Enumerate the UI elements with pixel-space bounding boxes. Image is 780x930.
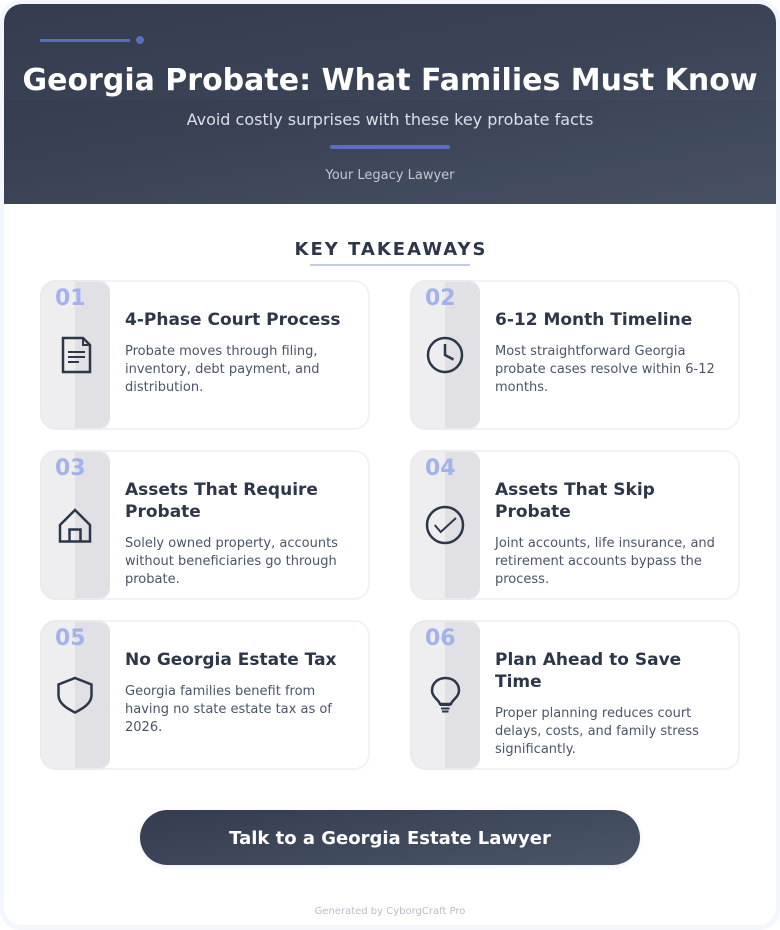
header banner <box>4 4 776 204</box>
icon: document <box>62 336 92 374</box>
section heading: KEY TAKEAWAYS <box>294 239 487 260</box>
card 3: assets requiring probate: 03 <box>55 456 86 481</box>
card 5: no estate tax <box>40 620 370 770</box>
card 2 body: months. <box>495 380 548 395</box>
card 3 body <box>125 536 338 587</box>
call to action button <box>140 810 640 865</box>
card 4 heading <box>495 480 655 522</box>
card 4 body: Joint accounts, life insurance, and <box>495 536 715 551</box>
card 5 body: Georgia families benefit from <box>125 684 315 699</box>
header lower band <box>4 100 776 204</box>
icon: clock <box>426 336 464 374</box>
card 4 body <box>494 536 715 587</box>
card 6 heading: Time <box>495 672 542 692</box>
card 3 heading: Assets That Require <box>125 480 318 500</box>
card 5 heading: No Georgia Estate Tax <box>125 650 337 670</box>
card 3: assets requiring probate <box>40 450 370 600</box>
card 4: assets skipping probate: 04 <box>425 456 456 481</box>
card 2: timeline: 02 <box>425 286 456 311</box>
card 1 body <box>125 344 320 395</box>
card 1 body: inventory, debt payment, and <box>125 362 320 377</box>
card 5 body: having no state estate tax as of <box>125 702 332 717</box>
call to action button: Talk to a Georgia Estate Lawyer <box>229 828 551 849</box>
card 3 body: Solely owned property, accounts <box>125 536 338 551</box>
title: Georgia Probate: What Families Must Know <box>22 63 758 98</box>
card 1: 4-phase court process <box>40 280 370 430</box>
card 6 body: significantly. <box>495 742 576 757</box>
card 1: 4-phase court process: 01 <box>55 286 86 311</box>
accent line and dot <box>40 36 144 44</box>
card 6: plan ahead <box>410 620 740 770</box>
card 2 body: probate cases resolve within 6-12 <box>495 362 715 377</box>
card 3 heading: Probate <box>125 502 201 522</box>
section heading underline <box>310 264 470 266</box>
card 5: no estate tax: 05 <box>55 626 86 651</box>
card 3 heading <box>125 480 318 522</box>
card 2 body <box>495 344 715 395</box>
card 1 heading: 4-Phase Court Process <box>125 310 341 330</box>
card 6 heading <box>495 650 681 692</box>
icon: light bulb <box>430 676 460 712</box>
brand name: Your Legacy Lawyer <box>326 168 454 183</box>
card 1 body: distribution. <box>125 380 203 395</box>
card 2 body: Most straightforward Georgia <box>495 344 686 359</box>
card 6: plan ahead: 06 <box>425 626 456 651</box>
card 6 body: Proper planning reduces court <box>495 706 691 721</box>
card 3 body: probate. <box>125 572 180 587</box>
card 6 heading: Plan Ahead to Save <box>495 650 681 670</box>
icon: check circle <box>426 506 464 544</box>
card 5 body: 2026. <box>125 720 162 735</box>
subtitle: Avoid costly surprises with these key probate facts <box>187 110 593 129</box>
card 4 heading: Assets That Skip <box>495 480 655 500</box>
card 2: timeline <box>410 280 740 430</box>
icon: shield <box>57 676 93 714</box>
card 4 heading: Probate <box>495 502 571 522</box>
icon: house <box>58 508 92 543</box>
card 4 body: retirement accounts bypass the <box>495 554 702 569</box>
subtitle rule <box>330 145 450 149</box>
card 4 body: process. <box>495 572 549 587</box>
card 4: assets skipping probate <box>410 450 740 600</box>
card 6 body: delays, costs, and family stress <box>495 724 699 739</box>
card 1 body: Probate moves through filing, <box>125 344 318 359</box>
card 2 heading: 6-12 Month Timeline <box>495 310 692 330</box>
card 5 body <box>125 684 332 735</box>
card 6 body <box>495 706 699 757</box>
card 3 body: without beneficiaries go through <box>125 554 337 569</box>
footer credit: Generated by CyborgCraft Pro <box>315 906 465 917</box>
